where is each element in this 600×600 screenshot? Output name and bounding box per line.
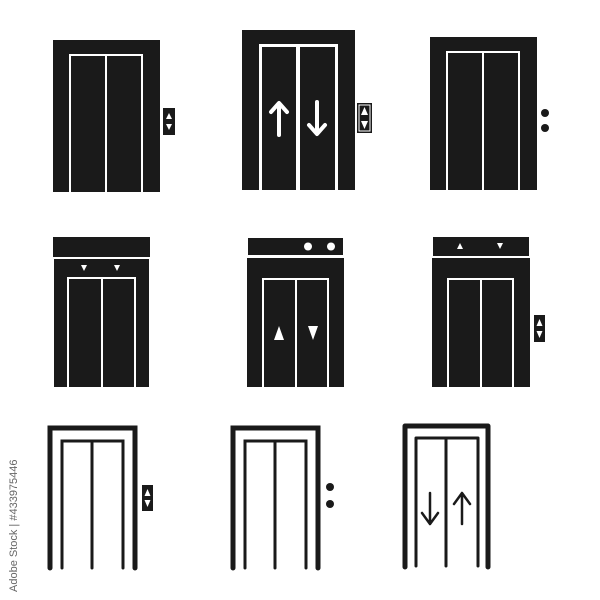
elevator icon 4: top bar, down indicators	[53, 237, 150, 387]
elevator icon 3: filled door with two round buttons	[430, 37, 549, 190]
elevator icon 7: outline door with side button	[50, 428, 153, 568]
elevator icon 6: top bar with arrows and side button	[432, 237, 545, 387]
elevator icon 5: top bar with lights, triangle arrows	[247, 238, 344, 387]
elevator icon 8: outline door with round buttons	[233, 428, 334, 568]
elevator icon 1: filled door with side button	[53, 40, 175, 192]
elevator icon 9: outline door with down/up arrows	[405, 426, 488, 567]
elevator icon 2: filled door with up/down arrows	[242, 30, 372, 190]
watermark caption: Adobe Stock | #433975446	[8, 459, 20, 592]
